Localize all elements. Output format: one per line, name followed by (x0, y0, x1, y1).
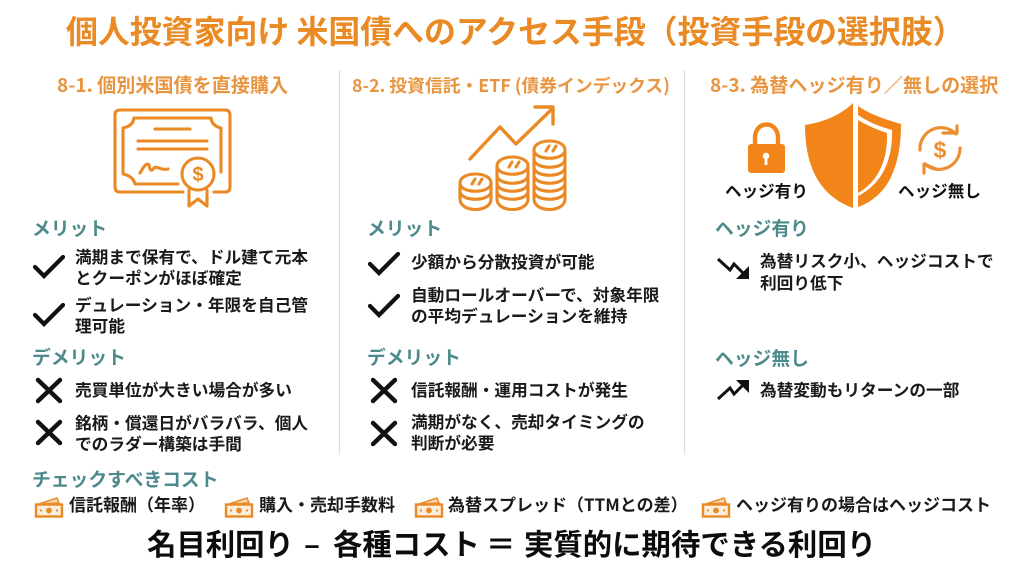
merit heading: メリット (32, 214, 107, 241)
merit item 1: とクーポンがほぼ確定 (75, 265, 242, 289)
merit heading: メリット (367, 214, 442, 241)
costs heading: チェックすべきコスト (32, 465, 218, 492)
panel: 8-3 currency hedge (710, 70, 998, 401)
heading: 8-1: 8-1. 個別米国債を直接購入 (57, 70, 288, 98)
demerit item 2: 判断が必要 (411, 430, 495, 454)
merit item 1 (35, 244, 308, 289)
formula: 実質的に期待できる利回り (524, 522, 876, 564)
merit item 2 (35, 292, 308, 337)
demerit item 2: 満期がなく、売却タイミングの (411, 409, 645, 433)
heading: 8-3: 8-3. 為替ヘッジ有り／無しの選択 (710, 70, 998, 98)
hedged item: 利回り低下 (760, 270, 843, 294)
divider (340, 70, 684, 455)
title: 個人投資家向け 米国債へのアクセス手段（投資手段の選択肢） (66, 7, 965, 53)
icon: shield (805, 103, 901, 208)
merit item 2: 理可能 (75, 313, 125, 337)
icon: certificate (115, 110, 230, 206)
demerit item 2: 銘柄・償還日がバラバラ、個人 (75, 410, 308, 434)
panel: costs to check (32, 465, 991, 516)
formula: – (304, 522, 320, 564)
formula: 各種コスト (333, 522, 480, 564)
merit item 2 (370, 282, 660, 327)
cost item: hedge cost: ヘッジ有りの場合はヘッジコスト (736, 491, 991, 516)
demerit heading: デメリット (32, 343, 126, 370)
merit item 1: 少額から分散投資が可能 (411, 249, 595, 273)
unhedged item: 為替変動もリターンの一部 (760, 377, 960, 401)
demerit item 2 (38, 410, 308, 455)
cost item: trade fee: 購入・売却手数料 (259, 491, 395, 516)
demerit item 1: 売買単位が大きい場合が多い (75, 377, 292, 401)
demerit item 2: でのラダー構築は手間 (75, 431, 242, 455)
merit item 2: の平均デュレーションを維持 (411, 303, 628, 327)
label: without hedge: ヘッジ無し (898, 178, 981, 202)
hedged item (718, 248, 994, 294)
icon: currency cycle: $ (934, 137, 947, 163)
merit item 2: 自動ロールオーバーで、対象年限 (411, 282, 660, 306)
merit item 1: 満期まで保有で、ドル建て元本 (75, 244, 308, 268)
cost item: trust fee: 信託報酬（年率） (69, 491, 205, 516)
label: with hedge: ヘッジ有り (725, 178, 808, 202)
icon: rising coins (460, 107, 565, 210)
formula: ＝ (486, 522, 515, 564)
panel: 8-2 funds and ETF (352, 72, 670, 454)
demerit item 1: 信託報酬・運用コストが発生 (411, 377, 628, 401)
heading: 8-2: 8-2. 投資信託・ETF (債券インデックス) (352, 72, 670, 98)
demerit item 2 (373, 409, 645, 454)
merit item 2: デュレーション・年限を自己管 (75, 292, 308, 316)
panel: 8-1 direct purchase (32, 70, 308, 455)
hedged heading: ヘッジ有り (715, 214, 809, 241)
icon: lock (748, 124, 785, 173)
unhedged heading: ヘッジ無し (715, 344, 809, 371)
demerit heading: デメリット (367, 343, 461, 370)
hedged item: 為替リスク小、ヘッジコストで (760, 248, 994, 272)
icon: currency cycle (920, 126, 960, 173)
formula: 名目利回り (147, 522, 294, 564)
icon: certificate: $ (192, 164, 204, 186)
cost item: fx spread: 為替スプレッド（TTMとの差） (448, 491, 688, 516)
